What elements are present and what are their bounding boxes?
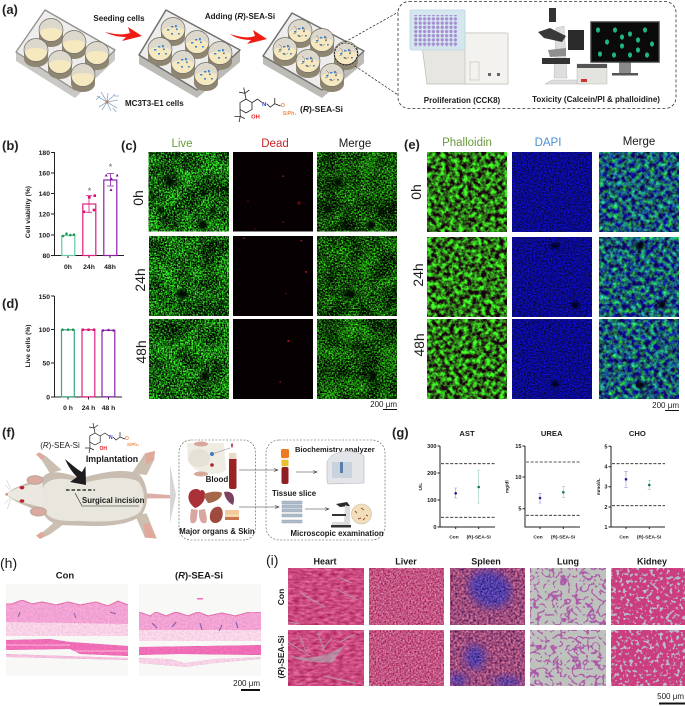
label (d): (d) xyxy=(2,296,19,311)
x labels xyxy=(63,405,115,412)
scale bar xyxy=(657,692,685,704)
molecule: (R)-SEA-Si xyxy=(85,423,139,453)
micrographs: Dead column xyxy=(233,152,313,399)
y ticks: 100 xyxy=(39,232,50,240)
arrow: slide to microscope xyxy=(305,508,329,510)
icon: blood tube xyxy=(281,449,289,484)
row label: 0h: 0h xyxy=(408,184,424,200)
well plate: compound added xyxy=(263,13,364,98)
chart: AST: (R)-SEA-Si xyxy=(467,534,491,540)
column headers xyxy=(313,556,667,566)
panel: (i) organ histology xyxy=(266,552,685,704)
micrographs: Merge column xyxy=(317,152,397,399)
header: Con: Con xyxy=(56,570,74,582)
panel: (e) phalloidin/DAPI staining xyxy=(404,136,679,411)
chart: UREA: Con xyxy=(533,534,543,540)
label: tissue slice: Tissue slice xyxy=(272,489,317,498)
illustration: mouse xyxy=(5,451,170,539)
label (c): (c) xyxy=(121,138,137,153)
micrographs: lung xyxy=(530,568,606,686)
micrographs: kidney xyxy=(611,568,685,686)
panel: (g) serum biochemistry xyxy=(392,425,665,540)
label: compound name: (R)-SEA-Si xyxy=(300,104,343,114)
x labels: 0 h xyxy=(63,405,73,412)
row label: 0h: 0h xyxy=(130,190,146,206)
flow chevron xyxy=(170,465,176,523)
implantation arrow xyxy=(65,459,86,485)
molecule: (R)-SEA-Si: SiPh₃ xyxy=(127,442,139,447)
y ticks: 180 xyxy=(39,150,50,157)
dashed box: analysis xyxy=(266,440,385,540)
column headers: Spleen xyxy=(471,556,501,566)
icon: microplate reader xyxy=(410,10,508,84)
significance stars: * xyxy=(88,186,92,196)
column header: Merge: Merge xyxy=(339,138,371,150)
molecule: (R)-SEA-Si: SiPh₃ xyxy=(283,111,297,117)
incision leader line xyxy=(75,493,139,506)
label (i): (i) xyxy=(266,552,278,568)
chart: UREA xyxy=(504,429,580,540)
label: toxicity: Toxicity (Calcein/PI & phalloidine) xyxy=(532,95,660,104)
dashed box: samples xyxy=(179,440,256,540)
arrow: adding compound xyxy=(230,30,267,44)
label: microscopic examination: Microscopic examination xyxy=(290,529,384,538)
icon: analyzer xyxy=(327,451,364,484)
chart: CHO: Con xyxy=(619,534,629,540)
y ticks: 50 xyxy=(42,360,50,368)
icon: magnified tissue xyxy=(352,504,372,524)
label: proliferation: Proliferation (CCK8) xyxy=(424,96,501,105)
significance stars: * xyxy=(109,162,113,172)
header: (R)-SEA-Si: (R)-SEA-Si xyxy=(175,570,223,582)
chart: UREA: UREA xyxy=(541,429,563,438)
zoom callout lines xyxy=(345,10,402,97)
chart: AST: AST xyxy=(459,429,475,438)
x labels: 48h xyxy=(104,264,116,271)
chart: AST: Con xyxy=(449,534,459,540)
dashed box: assays xyxy=(398,2,676,108)
micrographs: liver xyxy=(369,568,444,686)
panel: (d) live cells bar chart xyxy=(2,294,122,412)
micrographs: spleen xyxy=(449,563,525,687)
molecule: (R)-SEA-Si xyxy=(234,88,297,122)
label (f): (f) xyxy=(2,425,15,440)
chart: UREA: 10 xyxy=(515,475,522,481)
column header: Dead: Dead xyxy=(261,138,289,150)
micrographs: Merge column xyxy=(599,152,679,399)
bar 48h xyxy=(104,173,119,256)
scale bar: 500 μm xyxy=(657,692,684,701)
chart: CHO: (R)-SEA-Si xyxy=(637,534,661,540)
bar 0h xyxy=(62,232,75,256)
y axis title: Cell viability (%) xyxy=(25,186,32,238)
chart: CHO: 4 xyxy=(604,465,608,471)
arrow: seeding xyxy=(105,27,142,41)
arrow: tube to analyzer xyxy=(296,470,317,474)
micrographs: Phalloidin column xyxy=(427,152,507,399)
chart: CHO: CHO xyxy=(629,429,646,438)
chart: CHO xyxy=(596,429,665,540)
well plate: cells seeded xyxy=(139,10,240,98)
chart: CHO: 1 xyxy=(604,525,608,531)
significance stars xyxy=(88,162,113,196)
chart: UREA: (R)-SEA-Si xyxy=(551,534,575,540)
y ticks xyxy=(39,150,50,260)
x labels: 24h xyxy=(83,264,95,271)
row label: (R)-SEA-Si: (R)-SEA-Si xyxy=(276,636,286,678)
panel: (f) in vivo implantation schematic xyxy=(2,423,385,540)
icon: spleen xyxy=(224,492,234,505)
scale bar: 200 μm xyxy=(233,679,260,688)
icon: heart xyxy=(188,489,205,508)
micrographs: DAPI column xyxy=(512,152,592,399)
panel: (b) cell viability bar chart xyxy=(2,138,124,271)
icon: lung xyxy=(190,509,207,523)
molecule: (R)-SEA-Si: OH xyxy=(100,446,107,452)
label (b): (b) xyxy=(2,138,19,153)
well plate: empty xyxy=(16,10,115,98)
chart: AST: 100 xyxy=(427,498,436,504)
chart: CHO: mmol/L xyxy=(596,478,602,495)
label (h): (h) xyxy=(0,555,17,571)
molecule: (R)-SEA-Si: N xyxy=(262,102,266,108)
chart: CHO: 5 xyxy=(604,444,608,450)
column headers: Liver xyxy=(395,556,417,566)
icon: fluorescence microscope xyxy=(538,8,607,84)
icon: tissue slides xyxy=(282,501,302,523)
arrow: organs to slices xyxy=(239,506,279,508)
molecule: (R)-SEA-Si: O xyxy=(281,103,286,109)
micrographs: Live column xyxy=(149,152,229,399)
label: seeding cells: Seeding cells xyxy=(93,14,145,23)
micrographs: heart xyxy=(288,568,364,686)
row label: 24h: 24h xyxy=(132,268,148,292)
x labels: 24 h xyxy=(82,405,95,412)
x labels xyxy=(64,264,116,271)
icon: monitor with green cells xyxy=(591,22,659,76)
surgical incision marker xyxy=(66,489,95,491)
label (g): (g) xyxy=(392,425,409,440)
chart: UREA: 15 xyxy=(515,444,522,450)
scale bar: 200 μm xyxy=(370,400,397,409)
icon: MC3T3-E1 cell xyxy=(96,92,119,112)
chart: UREA: 5 xyxy=(518,507,522,513)
label: organs: Major organs & Skin xyxy=(179,527,255,536)
axes xyxy=(51,152,124,258)
chart: AST xyxy=(418,429,495,540)
icon: microscope xyxy=(331,502,351,528)
molecule: (R)-SEA-Si: OH xyxy=(251,115,260,121)
column headers: Kidney xyxy=(637,556,667,566)
icon: skin xyxy=(225,510,239,520)
column header: Phalloidin: Phalloidin xyxy=(442,137,492,149)
bar 24h xyxy=(83,194,96,256)
chart: AST: 300 xyxy=(427,444,436,450)
y ticks: 140 xyxy=(39,191,50,198)
micrograph: skin (R)-SEA-Si xyxy=(139,584,261,676)
label: biochemistry: Biochemistry analyzer xyxy=(295,445,375,454)
chart: AST: 200 xyxy=(427,471,436,477)
arrow: blood to tube xyxy=(239,468,278,472)
panel: (h) skin histology xyxy=(0,555,261,691)
y ticks: 100 xyxy=(39,327,50,334)
column header: Merge: Merge xyxy=(623,136,655,148)
y ticks: 80 xyxy=(42,253,50,260)
label: surgical incision: Surgical incision xyxy=(82,496,145,505)
label: MC3T3-E1 cells: MC3T3-E1 cells xyxy=(125,99,184,108)
column headers: Heart xyxy=(313,556,337,566)
row label: 48h: 48h xyxy=(133,340,149,364)
chart: UREA: mg/dl xyxy=(504,480,510,493)
label (e): (e) xyxy=(404,137,420,152)
micrograph: skin Con xyxy=(6,584,128,676)
row label: 48h: 48h xyxy=(411,333,427,357)
x labels: 48 h xyxy=(102,405,115,412)
label: compound: (R)-SEA-Si xyxy=(40,441,80,450)
y ticks: 160 xyxy=(39,170,50,178)
column headers: Lung xyxy=(557,556,579,566)
label: adding compound: Adding (R)-SEA-Si xyxy=(205,12,275,21)
chart: CHO: 3 xyxy=(604,485,608,491)
bars with dots xyxy=(61,328,115,397)
axes xyxy=(51,296,122,400)
row label: 24h: 24h xyxy=(410,263,426,287)
chart: CHO: 2 xyxy=(604,505,608,511)
x labels: 0h xyxy=(64,264,72,271)
column header: Live: Live xyxy=(171,138,193,150)
y ticks: 150 xyxy=(39,294,50,301)
icon: mouse head and blood draw xyxy=(187,442,236,489)
icon: liver xyxy=(204,492,222,503)
column header: DAPI: DAPI xyxy=(535,137,561,149)
y ticks: 0 xyxy=(46,394,50,402)
y ticks xyxy=(39,294,50,402)
chart: AST: U/L xyxy=(418,483,424,491)
icon: kidney xyxy=(210,507,223,523)
panel: (c) live/dead staining xyxy=(121,138,397,410)
panel: (a) experimental workflow xyxy=(2,2,676,122)
y axis title: Live cells (%) xyxy=(25,324,32,368)
chart: AST: 0 xyxy=(433,525,436,531)
y ticks: 120 xyxy=(39,212,50,218)
molecule: (R)-SEA-Si: N xyxy=(109,435,113,441)
label: blood: Blood xyxy=(206,475,228,484)
row label: Con: Con xyxy=(276,589,286,605)
label (a): (a) xyxy=(2,2,18,17)
scale bar: 200 μm xyxy=(652,401,679,410)
molecule: (R)-SEA-Si: O xyxy=(125,436,129,442)
label: implantation: Implantation xyxy=(86,454,138,464)
